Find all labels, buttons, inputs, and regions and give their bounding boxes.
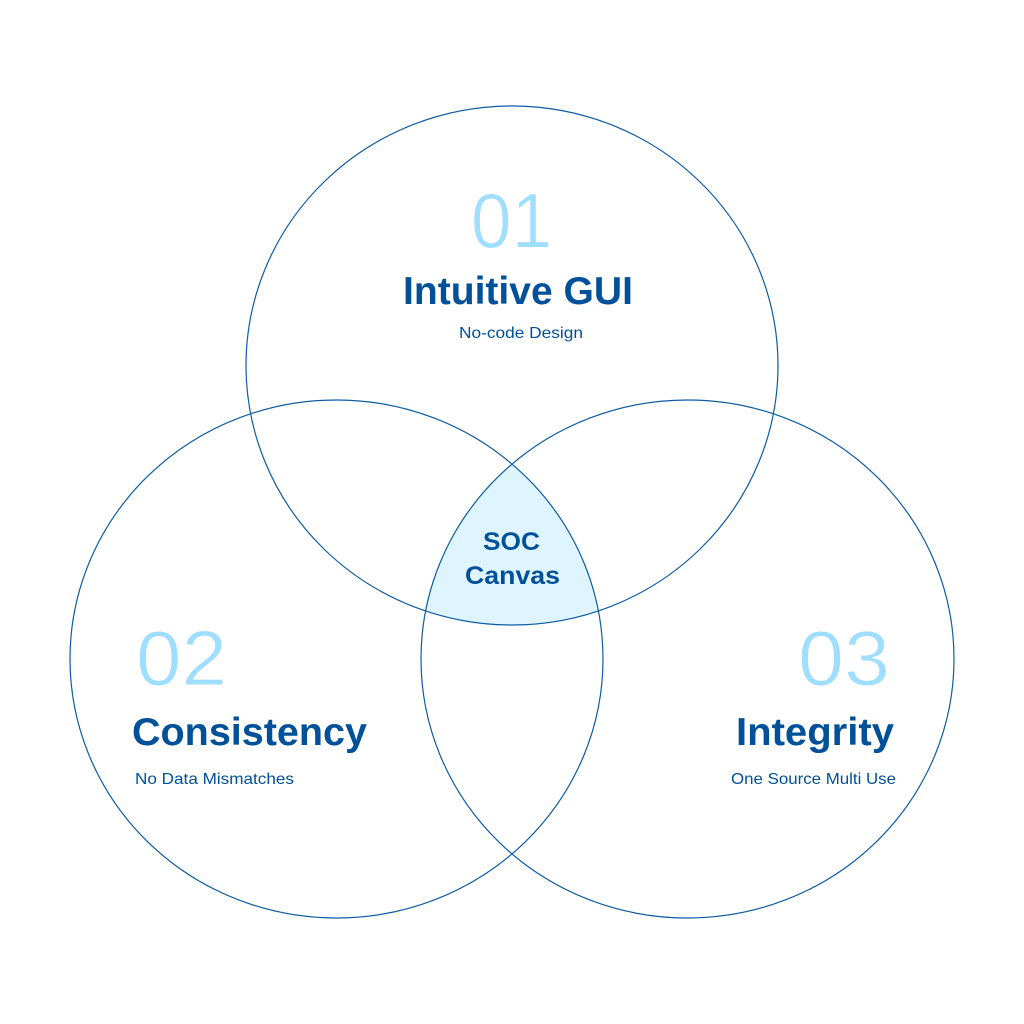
number 01: 01 (471, 176, 552, 264)
section 01: Intuitive GUI (403, 176, 633, 342)
subtext: One Source Multi Use: One Source Multi Use (731, 771, 896, 788)
center label: SOC Canvas: SOC (483, 528, 540, 556)
heading: Intuitive GUI: Intuitive GUI (403, 270, 633, 313)
venn circle: top (246, 106, 778, 625)
number 03: 03 (798, 614, 890, 702)
section 02: Consistency (132, 614, 367, 788)
heading: Integrity: Integrity (736, 711, 894, 754)
center overlap highlight (426, 465, 598, 624)
heading: Consistency: Consistency (132, 711, 367, 754)
subtext: No-code Design: No-code Design (459, 325, 583, 342)
subtext: No Data Mismatches: No Data Mismatches (135, 771, 294, 788)
center label: SOC Canvas: Canvas (465, 562, 560, 590)
number 02: 02 (136, 614, 227, 702)
section 03: Integrity (731, 614, 896, 788)
center label: SOC Canvas (465, 528, 560, 590)
venn circle: left (70, 400, 603, 918)
venn circle: right (421, 400, 954, 918)
